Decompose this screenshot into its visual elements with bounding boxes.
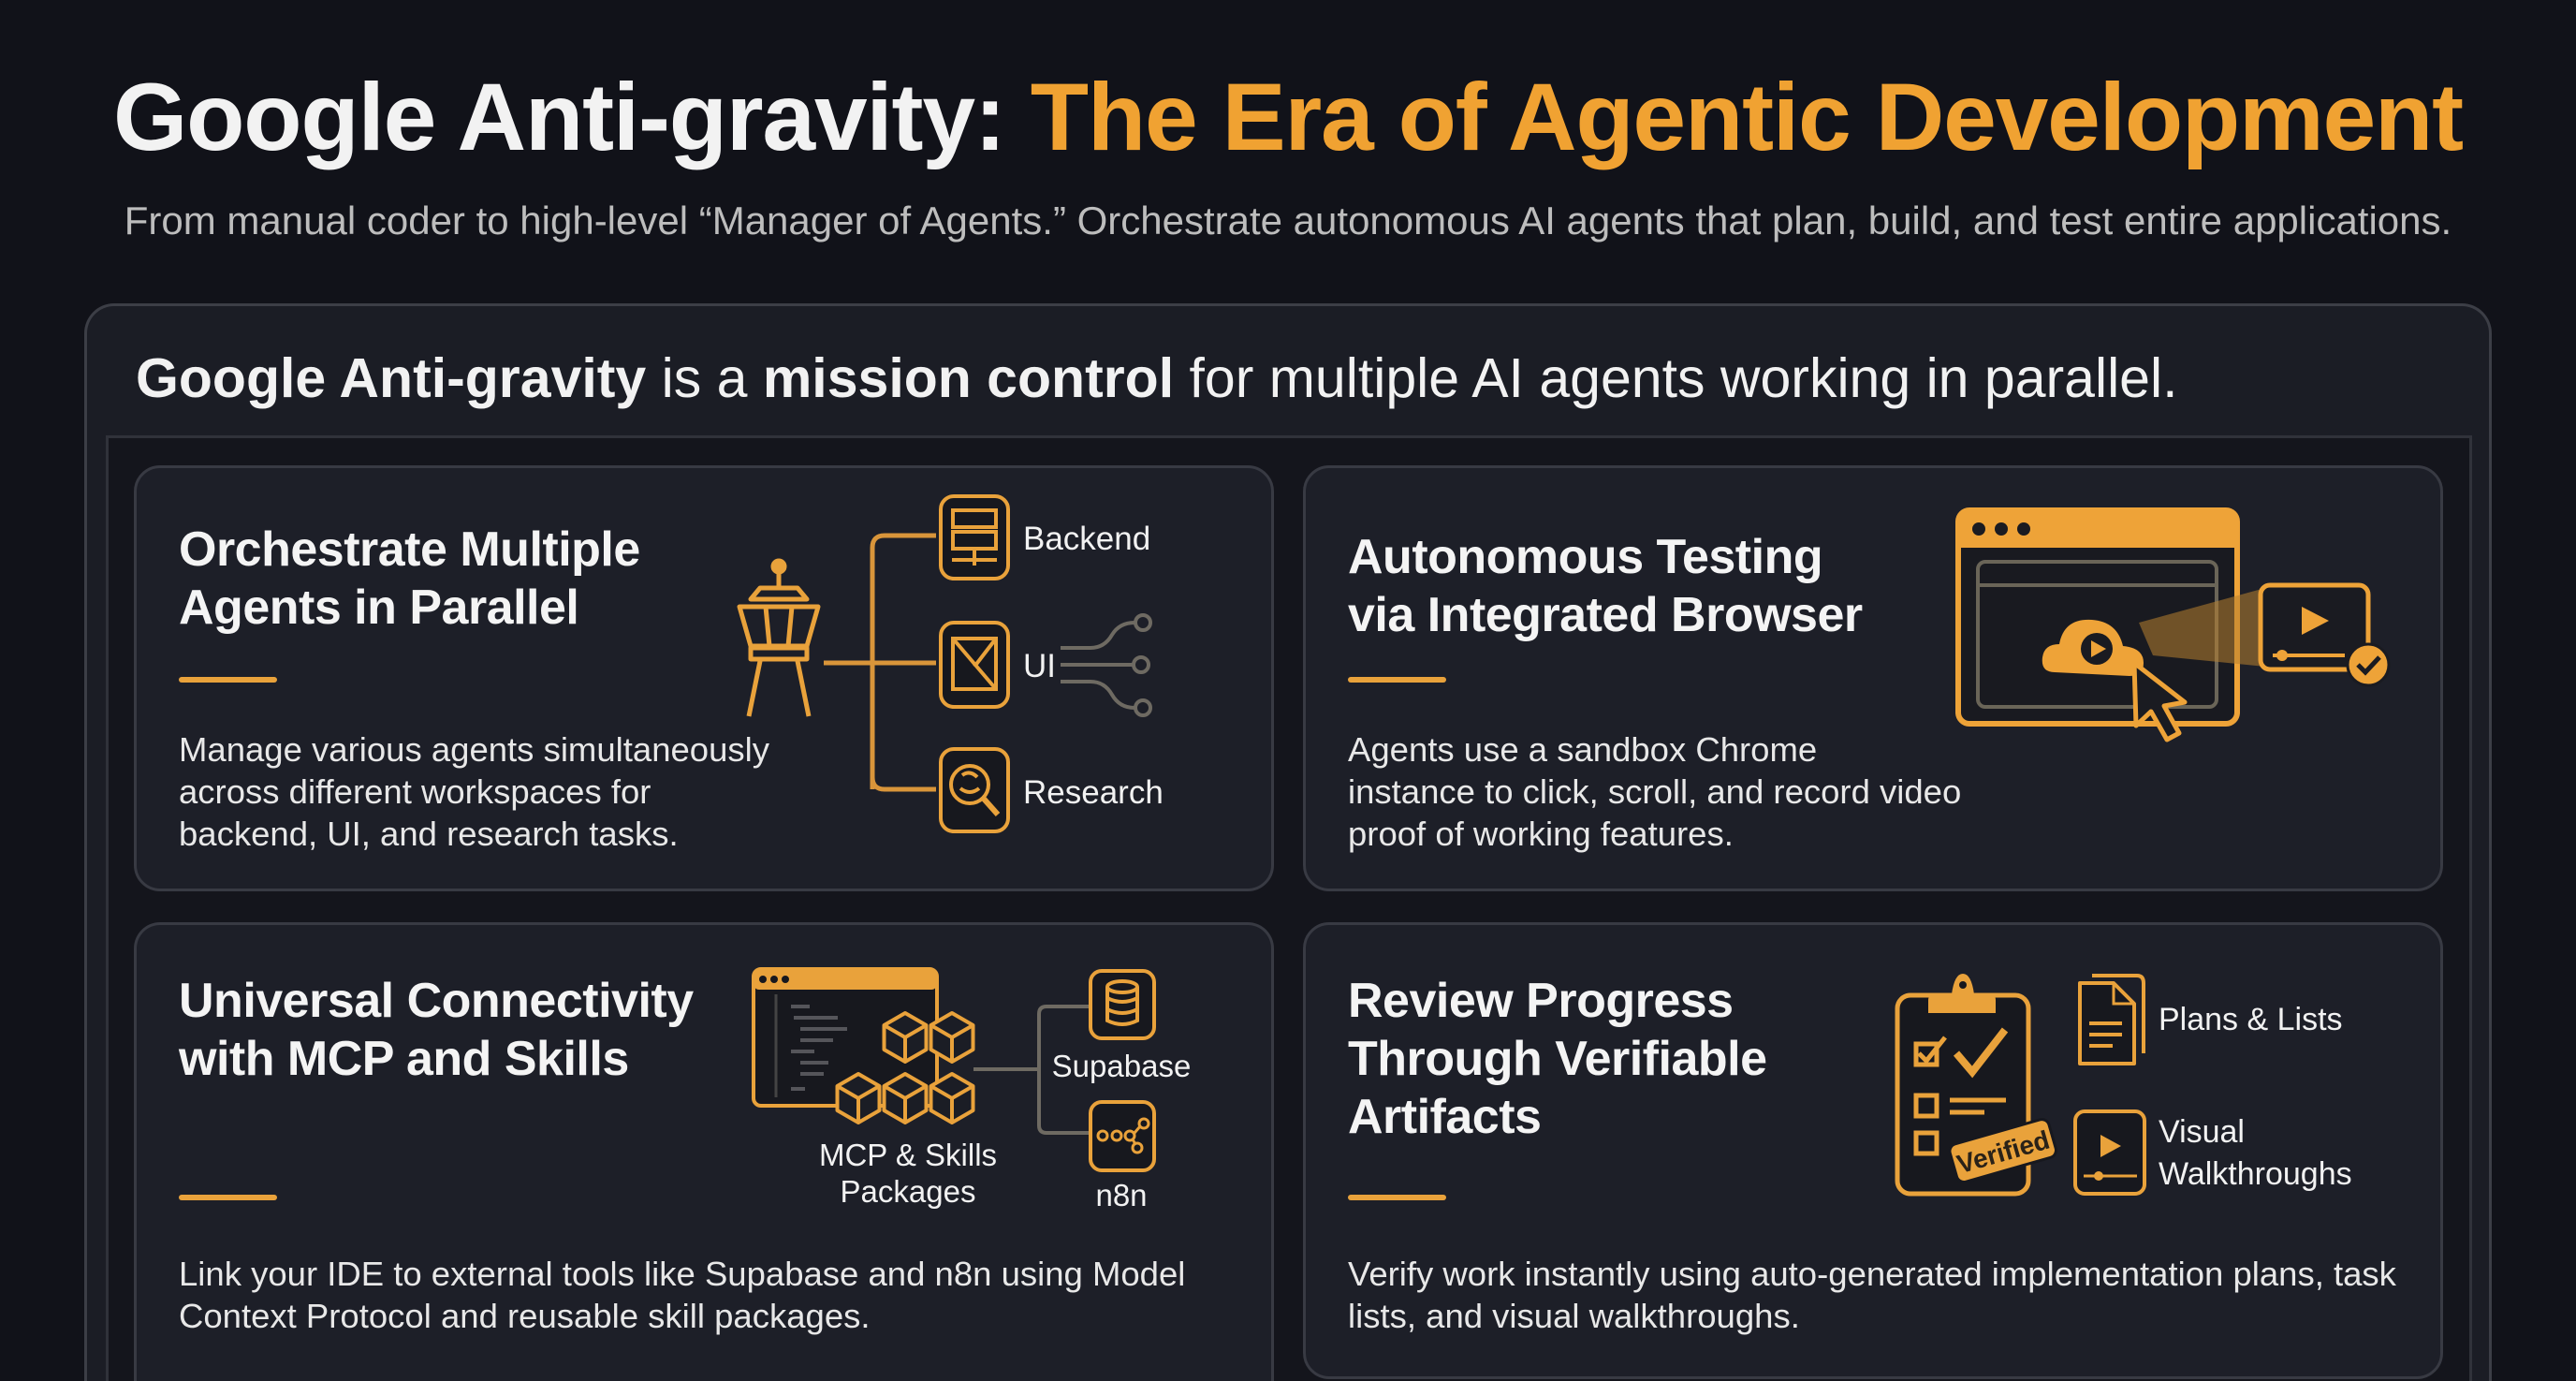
card title: Agents in Parallel [179,580,578,635]
description: Verify work instantly using auto-generated implementation plans, task [1348,1255,2396,1293]
subtitle: From manual coder to high-level “Manager of Agents.” Orchestrate autonomous AI agents that plan, build, and test entire applications. [124,198,2452,242]
card title: Autonomous Testing [1348,530,1822,584]
connector lines: tree [824,536,936,789]
inner area [106,435,2472,1381]
description: Manage various agents simultaneously [179,730,769,769]
icon: n8n [1090,1102,1154,1212]
headline: Google Anti-gravity is a mission control for multiple AI agents working in parallel. [136,347,2177,409]
icon: research: Research [1023,774,1164,811]
description: proof of working features. [1348,815,1734,853]
description [1348,730,1961,853]
description: backend, UI, and research tasks. [179,815,679,853]
icon: IDE with MCP cubes: Packages [841,1174,975,1209]
icon: UI [941,615,1150,715]
card title: Orchestrate Multiple [179,522,640,577]
icon: visual walkthroughs: Walkthroughs [2159,1156,2352,1192]
icon: n8n: n8n [1095,1178,1148,1212]
card title: Artifacts [1348,1090,1541,1144]
icon: supabase [1052,971,1191,1083]
card title [1348,974,1767,1144]
description: across different workspaces for [179,772,651,811]
description: Link your IDE to external tools like Supabase and n8n using Model [179,1255,1185,1293]
icon: control tower [739,561,818,716]
icon: browser testing [1958,510,2389,740]
icon: visual walkthroughs: Visual [2159,1114,2245,1150]
icon: visual walkthroughs [2075,1111,2352,1194]
icon: IDE with MCP cubes [754,969,997,1209]
panel: connectivity [134,922,1274,1381]
description [1348,1255,2396,1335]
description: Agents use a sandbox Chrome [1348,730,1817,769]
card title: with MCP and Skills [179,1032,629,1086]
icon: UI: UI [1023,648,1056,684]
card title: Review Progress [1348,974,1734,1028]
underline [179,677,277,683]
underline [1348,677,1446,683]
description [179,1255,1185,1335]
icon: verified clipboard [1897,974,2057,1194]
card title: Universal Connectivity [179,974,694,1028]
panel: testing [1303,465,2443,891]
panel: main [84,303,2492,1381]
icon: IDE with MCP cubes: MCP & Skills [819,1138,997,1172]
card title [1348,530,1863,642]
icon: supabase: Supabase [1052,1049,1191,1083]
description [179,730,769,853]
card title: Through Verifiable [1348,1032,1767,1086]
underline [1348,1195,1446,1200]
icon: plans & lists: Plans & Lists [2159,1002,2343,1037]
card title: via Integrated Browser [1348,588,1863,642]
panel: artifacts [1303,922,2443,1379]
panel: orchestrate [134,465,1274,891]
connector lines: integrations [973,1006,1090,1133]
underline [179,1195,277,1200]
description: instance to click, scroll, and record video [1348,772,1961,811]
icon: plans & lists [2080,976,2343,1064]
icon: backend [941,496,1150,579]
title: Google Anti-gravity: The Era of Agentic Development [113,64,2463,170]
icon: verified clipboard: Verified [1954,1125,2053,1179]
description: Context Protocol and reusable skill packages. [179,1297,871,1335]
description: lists, and visual walkthroughs. [1348,1297,1800,1335]
card title [178,974,694,1086]
card title [179,522,640,635]
icon: research [941,749,1164,831]
icon: backend: Backend [1023,521,1150,557]
